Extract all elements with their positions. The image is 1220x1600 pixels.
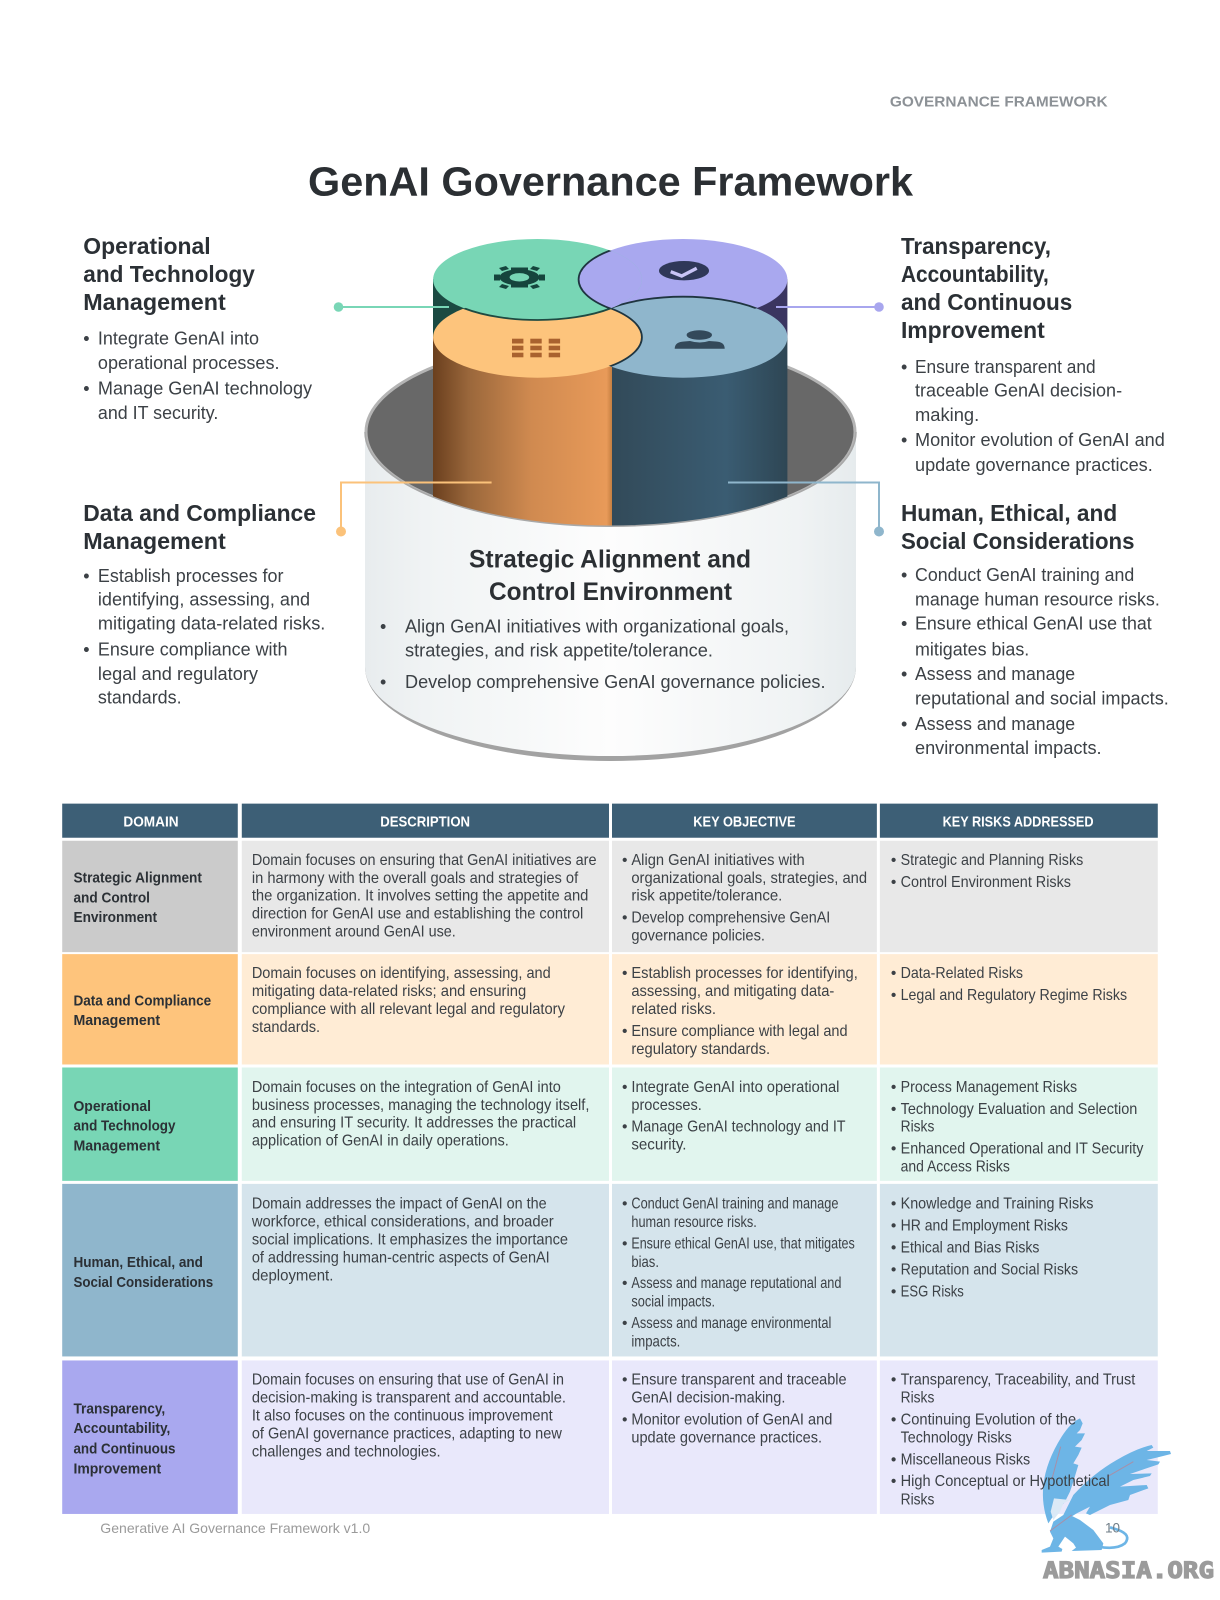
table row: operational and technology: • bbox=[891, 1079, 896, 1096]
panel: human, ethical and social considerations: reputational and social impacts. bbox=[915, 688, 1169, 708]
table row: operational and technology: Process Management Risks bbox=[901, 1079, 1077, 1096]
table row text: transparency and accountability: • bbox=[622, 1372, 627, 1389]
table row text: transparency and accountability: and Continuous bbox=[73, 1441, 175, 1458]
table row: data and compliance: assessing, and mitigating data- bbox=[631, 983, 834, 1000]
table row: strategic alignment: direction for GenAI use and establishing the control bbox=[252, 906, 583, 923]
panel: operational and technology management bbox=[83, 233, 312, 423]
table row: human, ethical and social: Domain addresses the impact of GenAI on the bbox=[252, 1196, 547, 1213]
table row text: transparency and accountability: High Conceptual or Hypothetical bbox=[901, 1473, 1110, 1490]
table row text: transparency and accountability: update governance practices. bbox=[631, 1429, 822, 1446]
table row: human, ethical and social: Ethical and Bias Risks bbox=[901, 1240, 1040, 1257]
panel: operational and technology management: operational processes. bbox=[98, 353, 280, 373]
panel: transparency, accountability and continuous improvement: Transparency, bbox=[901, 233, 1051, 259]
panel: data and compliance management: Management bbox=[83, 528, 226, 554]
table row: strategic alignment: in harmony with the overall goals and strategies of bbox=[252, 870, 579, 887]
table row: human, ethical and social: • bbox=[622, 1196, 627, 1213]
table header bbox=[62, 804, 1158, 838]
table row: strategic alignment: governance policies. bbox=[631, 927, 765, 944]
table row: operational and technology: Enhanced Operational and IT Security bbox=[901, 1141, 1144, 1158]
icon: gear bbox=[494, 266, 545, 289]
green cap bbox=[433, 239, 642, 320]
panel: human, ethical and social considerations: environmental impacts. bbox=[915, 738, 1102, 758]
panel: human, ethical and social considerations: Assess and manage bbox=[915, 664, 1075, 684]
table row: operational and technology: • bbox=[891, 1101, 896, 1118]
title: GenAI Governance Framework bbox=[308, 159, 913, 205]
panel: operational and technology management: and IT security. bbox=[98, 403, 218, 423]
table row: operational and technology: business processes, managing the technology itself, bbox=[252, 1097, 589, 1114]
panel: transparency, accountability and continuous improvement: • bbox=[901, 357, 907, 377]
table row: data and compliance: Establish processes for identifying, bbox=[631, 965, 858, 982]
table row text: transparency and accountability: It also focuses on the continuous improvement bbox=[252, 1407, 553, 1424]
table row: operational and technology: and Technology bbox=[73, 1118, 176, 1135]
table row: data and compliance: Ensure compliance with legal and bbox=[631, 1023, 848, 1040]
bowl interior bbox=[366, 338, 855, 526]
panel: human, ethical and social considerations: manage human resource risks. bbox=[915, 590, 1160, 610]
table row text: transparency and accountability: Continuing Evolution of the bbox=[901, 1411, 1076, 1428]
table row: human, ethical and social: Social Considerations bbox=[73, 1274, 213, 1291]
table row: strategic alignment bbox=[62, 841, 1158, 952]
icon: data grid bbox=[512, 339, 560, 357]
table row: data and compliance: Legal and Regulatory Regime Risks bbox=[901, 987, 1127, 1004]
icon: griffin logo bbox=[1042, 1418, 1171, 1553]
panel: operational and technology management: and Technology bbox=[83, 261, 255, 287]
center heading: Strategic Alignment and bbox=[469, 546, 751, 574]
table row: strategic alignment: the organization. It involves setting the appetite and bbox=[252, 888, 588, 905]
table row: data and compliance: Domain focuses on identifying, assessing, and bbox=[252, 965, 551, 982]
table row: human, ethical and social: human resource risks. bbox=[631, 1214, 757, 1231]
table row: operational and technology: and ensuring IT security. It addresses the practical bbox=[252, 1115, 576, 1132]
panel: operational and technology management: Manage GenAI technology bbox=[98, 378, 312, 398]
table row: human, ethical and social: Assess and manage environmental bbox=[631, 1315, 831, 1332]
table row: human, ethical and social: • bbox=[622, 1315, 627, 1332]
table row text: transparency and accountability: decision-making is transparent and accountable. bbox=[252, 1389, 566, 1406]
panel: data and compliance management: mitigating data-related risks. bbox=[98, 614, 325, 634]
panel: human, ethical and social considerations: Assess and manage bbox=[915, 714, 1075, 734]
panel: data and compliance management bbox=[83, 500, 325, 707]
panel: data and compliance management: Ensure compliance with bbox=[98, 639, 288, 659]
table row: strategic alignment: • bbox=[891, 874, 896, 891]
panel: transparency, accountability and continuous improvement bbox=[901, 233, 1165, 475]
footer note: Generative AI Governance Framework v1.0 bbox=[100, 1521, 370, 1536]
center bullets: Align GenAI initiatives with organizational goals, bbox=[405, 616, 789, 636]
table row: strategic alignment: Domain focuses on ensuring that GenAI initiatives are bbox=[252, 852, 597, 869]
table row text: transparency and accountability: Monitor evolution of GenAI and bbox=[631, 1411, 832, 1428]
panel: operational and technology management: Integrate GenAI into bbox=[98, 328, 259, 348]
table row: human, ethical and social: impacts. bbox=[631, 1333, 680, 1350]
table row: human, ethical and social: • bbox=[891, 1240, 896, 1257]
panel: data and compliance management: Data and Compliance bbox=[83, 500, 316, 526]
table row: operational and technology: Integrate GenAI into operational bbox=[631, 1079, 839, 1096]
connector: green bbox=[334, 302, 449, 312]
table row: data and compliance: Management bbox=[73, 1012, 160, 1029]
table row: human, ethical and social: Human, Ethical, and bbox=[73, 1254, 203, 1271]
table header: DOMAIN bbox=[123, 815, 179, 831]
connector: orange bbox=[336, 482, 492, 536]
table row: operational and technology: security. bbox=[631, 1137, 686, 1154]
table row text: transparency and accountability: challenges and technologies. bbox=[252, 1444, 441, 1461]
table row: strategic alignment: organizational goals, strategies, and bbox=[631, 870, 867, 887]
table row: human, ethical and social: social implications. It emphasizes the importance bbox=[252, 1231, 568, 1248]
table row text: transparency and accountability: Transparency, bbox=[73, 1400, 165, 1417]
panel: operational and technology management: Management bbox=[83, 289, 226, 315]
table row: operational and technology: Technology Evaluation and Selection bbox=[901, 1101, 1137, 1118]
table row: data and compliance: standards. bbox=[252, 1019, 320, 1036]
table row: operational and technology: • bbox=[891, 1141, 896, 1158]
table row text: transparency and accountability: • bbox=[891, 1452, 896, 1469]
table row background: transparency and accountability bbox=[62, 1360, 1158, 1514]
table row: human, ethical and social: ESG Risks bbox=[901, 1283, 964, 1300]
table header: KEY RISKS ADDRESSED bbox=[943, 815, 1094, 831]
table row text: transparency and accountability: Risks bbox=[901, 1389, 935, 1406]
panel: human, ethical and social considerations: Ensure ethical GenAI use that bbox=[915, 614, 1152, 634]
panel: data and compliance management: Establish processes for bbox=[98, 566, 284, 586]
panel: human, ethical and social considerations: • bbox=[901, 565, 907, 585]
table row text: transparency and accountability: Miscellaneous Risks bbox=[901, 1452, 1030, 1469]
center bullets bbox=[380, 616, 826, 692]
table row text: transparency and accountability: Transparency, Traceability, and Trust bbox=[901, 1372, 1136, 1389]
table row: human, ethical and social: deployment. bbox=[252, 1268, 333, 1285]
table row: data and compliance: Data-Related Risks bbox=[901, 965, 1023, 982]
table row: operational and technology: Domain focuses on the integration of GenAI into bbox=[252, 1079, 561, 1096]
table row: human, ethical and social: • bbox=[622, 1275, 627, 1292]
table row: data and compliance: related risks. bbox=[631, 1001, 716, 1018]
table row text: transparency and accountability: Technology Risks bbox=[901, 1429, 1012, 1446]
table row: strategic alignment: Strategic Alignment bbox=[73, 869, 202, 886]
table row: operational and technology bbox=[62, 1067, 1158, 1181]
table row: strategic alignment: Develop comprehensive GenAI bbox=[631, 909, 830, 926]
table row: human, ethical and social: Knowledge and Training Risks bbox=[901, 1196, 1094, 1213]
table row text: transparency and accountability: • bbox=[891, 1473, 896, 1490]
dark side strips bbox=[433, 279, 787, 339]
table row: strategic alignment: • bbox=[622, 852, 627, 869]
center bullets: strategies, and risk appetite/tolerance. bbox=[405, 640, 713, 660]
table row: strategic alignment: Align GenAI initiatives with bbox=[631, 852, 805, 869]
panel: transparency, accountability and continuous improvement: Ensure transparent and bbox=[915, 357, 1096, 377]
icon: person bbox=[675, 330, 725, 349]
panel: data and compliance management: standards. bbox=[98, 687, 182, 707]
table row text: transparency and accountability: Improvement bbox=[73, 1460, 161, 1477]
table row: operational and technology: processes. bbox=[631, 1097, 702, 1114]
panel: transparency, accountability and continuous improvement: making. bbox=[915, 405, 979, 425]
panel: transparency, accountability and continuous improvement: traceable GenAI decision- bbox=[915, 380, 1122, 400]
table row: human, ethical and social: • bbox=[622, 1235, 627, 1252]
center bullets: • bbox=[380, 672, 386, 692]
table row: operational and technology: Manage GenAI technology and IT bbox=[631, 1119, 846, 1136]
table row: operational and technology: application of GenAI in daily operations. bbox=[252, 1132, 509, 1149]
table row text: transparency and accountability: Ensure transparent and traceable bbox=[631, 1372, 847, 1389]
panel: human, ethical and social considerations: • bbox=[901, 714, 907, 734]
panel: human, ethical and social considerations bbox=[901, 500, 1169, 758]
section label: GOVERNANCE FRAMEWORK bbox=[890, 93, 1108, 110]
table row: strategic alignment: • bbox=[622, 909, 627, 926]
table row: data and compliance: compliance with all relevant legal and regulatory bbox=[252, 1001, 565, 1018]
table row: data and compliance: mitigating data-related risks; and ensuring bbox=[252, 983, 526, 1000]
table row: data and compliance: • bbox=[891, 987, 896, 1004]
purple cap bbox=[579, 239, 787, 320]
table row: strategic alignment: Strategic and Planning Risks bbox=[901, 852, 1083, 869]
connector: blue bbox=[728, 482, 884, 536]
table row text: transparency and accountability: • bbox=[891, 1372, 896, 1389]
table header: KEY OBJECTIVE bbox=[693, 815, 796, 831]
table row: data and compliance: Data and Compliance bbox=[73, 993, 211, 1010]
table row: human, ethical and social: Reputation and Social Risks bbox=[901, 1261, 1078, 1278]
panel: transparency, accountability and continuous improvement: Monitor evolution of GenAI and bbox=[915, 430, 1165, 450]
table row text: transparency and accountability bbox=[73, 1372, 1136, 1509]
table row: strategic alignment: environment around GenAI use. bbox=[252, 923, 456, 940]
table row text: transparency and accountability: • bbox=[622, 1411, 627, 1428]
table row: human, ethical and social: • bbox=[891, 1217, 896, 1234]
table row: data and compliance: • bbox=[622, 965, 627, 982]
panel: data and compliance management: identifying, assessing, and bbox=[98, 590, 310, 610]
panel: data and compliance management: • bbox=[83, 566, 90, 586]
orange cap bbox=[433, 308, 643, 378]
front wall bbox=[365, 432, 856, 761]
page number: 10 bbox=[1105, 1520, 1120, 1536]
table row: data and compliance: regulatory standards. bbox=[631, 1041, 770, 1058]
table row: human, ethical and social: bias. bbox=[631, 1254, 659, 1271]
panel: operational and technology management: • bbox=[83, 378, 90, 398]
table header: DESCRIPTION bbox=[380, 815, 470, 831]
table row text: transparency and accountability: of GenAI governance practices, adapting to new bbox=[252, 1426, 563, 1443]
table row: strategic alignment: Control Environment Risks bbox=[901, 874, 1071, 891]
panel: human, ethical and social considerations: Human, Ethical, and bbox=[901, 500, 1117, 526]
table row: operational and technology: Management bbox=[73, 1138, 160, 1155]
table row: operational and technology: Risks bbox=[901, 1119, 935, 1136]
table row: operational and technology: • bbox=[622, 1079, 627, 1096]
panel: transparency, accountability and continuous improvement: • bbox=[901, 430, 907, 450]
table row: strategic alignment: Environment bbox=[73, 909, 157, 926]
table row: human, ethical and social: Conduct GenAI training and manage bbox=[631, 1196, 838, 1213]
table row: data and compliance bbox=[62, 954, 1158, 1064]
panel: transparency, accountability and continuous improvement: update governance practices. bbox=[915, 455, 1153, 475]
table row: human, ethical and social: of addressing human-centric aspects of GenAI bbox=[252, 1250, 550, 1267]
table row: human, ethical and social: Ensure ethical GenAI use, that mitigates bbox=[631, 1235, 855, 1252]
table row: operational and technology: • bbox=[622, 1119, 627, 1136]
table row: human, ethical and social: HR and Employment Risks bbox=[901, 1217, 1068, 1234]
table row: operational and technology: and Access Risks bbox=[901, 1159, 1010, 1176]
panel: human, ethical and social considerations: Conduct GenAI training and bbox=[915, 565, 1134, 585]
table row text: transparency and accountability: Accountability, bbox=[73, 1420, 170, 1437]
cylinder diagram bbox=[334, 239, 884, 761]
table row: human, ethical and social: social impacts. bbox=[631, 1294, 715, 1311]
center heading: Control Environment bbox=[489, 578, 733, 606]
table row: strategic alignment: • bbox=[891, 852, 896, 869]
table row: human, ethical and social: • bbox=[891, 1261, 896, 1278]
table row text: transparency and accountability: Domain focuses on ensuring that use of GenAI in bbox=[252, 1372, 564, 1389]
icon: check badge bbox=[659, 261, 709, 280]
table row: human, ethical and social: • bbox=[891, 1283, 896, 1300]
center bullets: Develop comprehensive GenAI governance policies. bbox=[405, 672, 826, 692]
orange column bbox=[433, 337, 612, 548]
panel: operational and technology management: • bbox=[83, 328, 90, 348]
table row: data and compliance: • bbox=[891, 965, 896, 982]
table row: human, ethical and social: workforce, ethical considerations, and broader bbox=[251, 1214, 554, 1231]
table row: human, ethical and social bbox=[62, 1184, 1158, 1356]
connector: purple bbox=[776, 302, 884, 312]
panel: human, ethical and social considerations: Social Considerations bbox=[901, 528, 1135, 554]
table row: strategic alignment: risk appetite/tolerance. bbox=[631, 888, 782, 905]
panel: operational and technology management: Operational bbox=[83, 233, 211, 259]
table row: human, ethical and social: • bbox=[891, 1196, 896, 1213]
panel: human, ethical and social considerations: mitigates bias. bbox=[915, 639, 1029, 659]
table row text: transparency and accountability: • bbox=[891, 1411, 896, 1428]
table row: operational and technology: Operational bbox=[73, 1098, 151, 1115]
panel: data and compliance management: • bbox=[83, 639, 90, 659]
table row: strategic alignment: and Control bbox=[73, 890, 150, 907]
center bullets: • bbox=[380, 616, 386, 636]
watermark text: ABNASIA.ORG bbox=[1043, 1559, 1214, 1584]
table row: human, ethical and social: Assess and manage reputational and bbox=[631, 1275, 841, 1292]
table row text: transparency and accountability: GenAI decision-making. bbox=[631, 1389, 785, 1406]
panel: transparency, accountability and continuous improvement: and Continuous bbox=[901, 289, 1072, 315]
center heading bbox=[469, 546, 751, 606]
panel: transparency, accountability and continuous improvement: Improvement bbox=[901, 317, 1045, 343]
panel: transparency, accountability and continuous improvement: Accountability, bbox=[901, 261, 1049, 287]
blue cap bbox=[610, 296, 788, 378]
panel: human, ethical and social considerations: • bbox=[901, 614, 907, 634]
table row: data and compliance: • bbox=[622, 1023, 627, 1040]
panel: human, ethical and social considerations: • bbox=[901, 664, 907, 684]
purple cap overlap bbox=[578, 250, 642, 309]
table row text: transparency and accountability: Risks bbox=[901, 1492, 935, 1509]
dark teal column bbox=[612, 337, 787, 548]
panel: data and compliance management: legal and regulatory bbox=[98, 664, 258, 684]
